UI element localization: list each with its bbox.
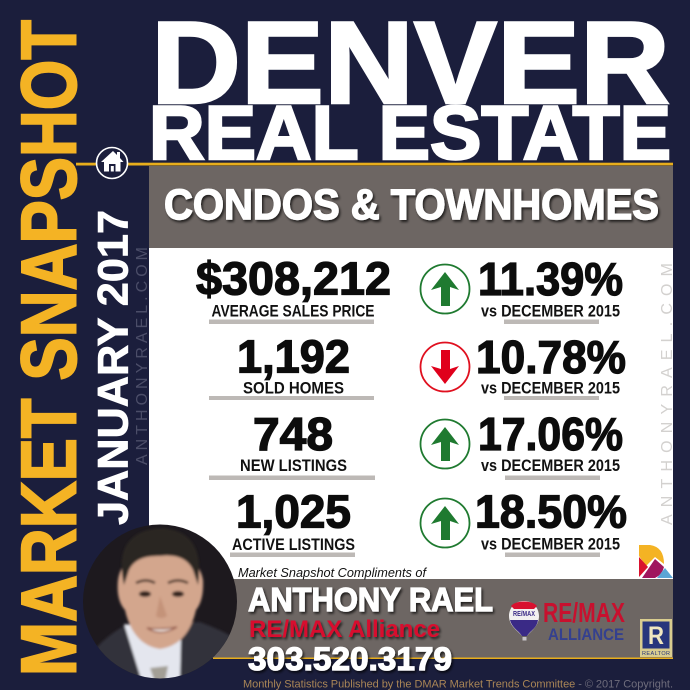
stat: sold homes: 1,192 (237, 330, 350, 382)
stat: average sales price: AVERAGE SALES PRICE (212, 302, 374, 320)
stat: new listings: 748 (253, 408, 333, 460)
change: new listings up 17.06% (420, 408, 623, 480)
icon: home badge (96, 148, 128, 178)
title: Real Estate: REAL ESTATE (149, 91, 671, 176)
change: sold down 10.78%: vs DECEMBER 2015 (481, 378, 620, 398)
stat: new listings (209, 408, 375, 480)
agent name: ANTHONY RAEL (248, 581, 493, 618)
heading: Condos & Townhomes: CONDOS & TOWNHOMES (164, 181, 659, 229)
sidebar date: January 2017: JANUARY 2017 (90, 210, 138, 525)
icon: colorful D logo (639, 545, 673, 578)
stat: active listings (230, 486, 355, 557)
title: Denver: DENVER (151, 0, 670, 128)
gold line under agent band (213, 658, 673, 659)
agent brokerage: RE/MAX Alliance (249, 616, 440, 643)
change: active listings up 18.50%: 18.50% (475, 486, 627, 538)
brokerage logo: RE/MAX Alliance (543, 597, 625, 644)
watermark: left website: ANTHONYRAEL.COM (134, 247, 151, 465)
change: price up 11.39%: 11.39% (478, 253, 623, 305)
icon: green up arrow (420, 264, 470, 314)
icon: RE/MAX balloon (509, 601, 539, 640)
panel: white stats panel (149, 248, 673, 580)
brokerage logo: RE/MAX Alliance: RE/MAX (543, 597, 625, 628)
change: active listings up 18.50% (420, 486, 627, 557)
icon: Realtor badge: R (648, 622, 664, 650)
change: new listings up 17.06%: 17.06% (478, 408, 623, 460)
stat: sold homes: SOLD HOMES (243, 378, 344, 398)
icon: Realtor badge (640, 619, 672, 657)
change: sold down 10.78%: 10.78% (476, 331, 626, 383)
panel: gray agent band (200, 579, 673, 658)
agent phone: 303.520.3179 (248, 641, 452, 677)
watermark: right website: ANTHONYRAEL.COM (659, 263, 676, 525)
photo: agent portrait (80, 522, 240, 685)
icon: green up arrow (420, 420, 470, 468)
panel: gray heading band (149, 166, 673, 248)
change: active listings up 18.50%: vs DECEMBER 2015 (481, 534, 620, 554)
change: price up 11.39% (420, 253, 623, 324)
brokerage logo: RE/MAX Alliance: ALLIANCE (548, 625, 624, 644)
change: sold down 10.78% (420, 331, 626, 400)
icon: red down arrow (420, 342, 470, 392)
caption: compliments line: Market Snapshot Compliments of (238, 565, 427, 580)
stat: average sales price: $308,212 (196, 252, 391, 304)
stat: active listings: ACTIVE LISTINGS (232, 535, 355, 554)
change: price up 11.39%: vs DECEMBER 2015 (481, 302, 620, 320)
stat: active listings: 1,025 (236, 486, 351, 538)
gold divider line (76, 163, 673, 166)
icon: Realtor badge: REALTOR (642, 651, 670, 657)
icon: green up arrow (420, 498, 470, 548)
stat: sold homes (209, 330, 374, 400)
change: new listings up 17.06%: vs DECEMBER 2015 (481, 456, 620, 475)
icon: RE/MAX balloon: RE/MAX (513, 611, 535, 618)
stat: new listings: NEW LISTINGS (240, 456, 347, 475)
